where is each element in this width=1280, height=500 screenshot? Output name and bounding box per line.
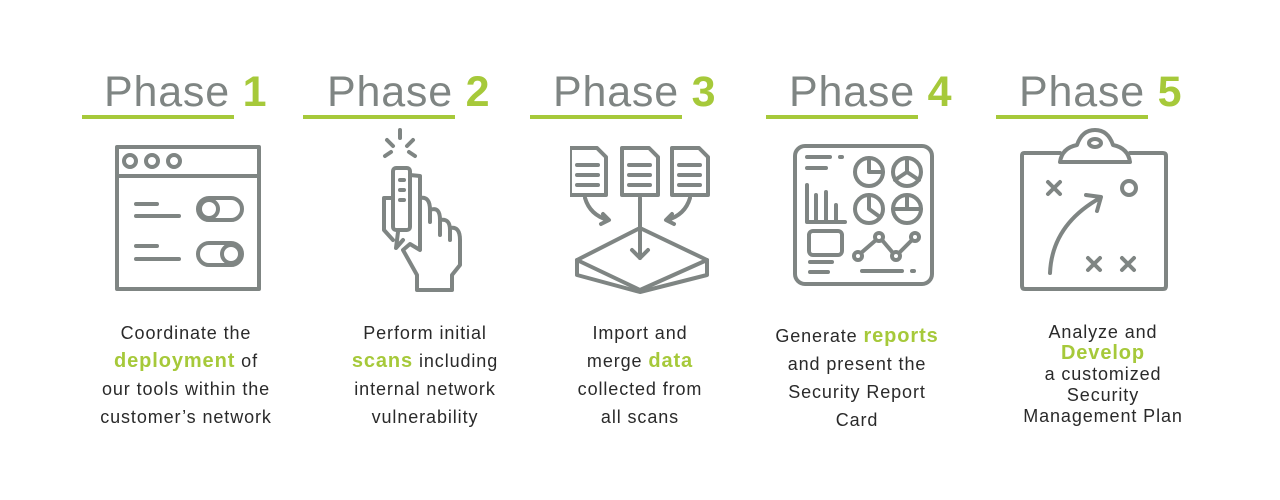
text phase 2: Perform initial xyxy=(363,323,487,343)
phase 5 heading: Phase 5 xyxy=(1019,68,1182,116)
text phase 2: vulnerability xyxy=(372,407,478,427)
text phase 1: Coordinate the xyxy=(121,323,251,343)
icon: browser with toggles xyxy=(115,145,261,291)
text phase 5: Management Plan xyxy=(1023,406,1183,426)
text phase 5: Security xyxy=(1067,385,1139,405)
text phase 4: Card xyxy=(836,410,878,430)
icon: hand with scanner xyxy=(382,128,462,292)
phase 4 heading: Phase 4 xyxy=(789,68,952,116)
text phase 2: internal network xyxy=(354,379,496,399)
text phase 5 xyxy=(1023,322,1183,426)
text phase 3: Import and xyxy=(592,323,688,343)
text phase 1 xyxy=(100,323,272,427)
text phase 4 xyxy=(775,325,939,430)
text phase 5: a customized xyxy=(1045,364,1161,384)
text phase 4: Security Report xyxy=(788,382,926,402)
icon: clipboard strategy xyxy=(1020,128,1168,291)
text phase 3: merge data xyxy=(587,350,693,372)
text phase 4: and present the xyxy=(788,354,926,374)
text phase 2: scans including xyxy=(352,350,498,372)
text phase 3: collected from xyxy=(578,379,702,399)
text phase 3 xyxy=(578,323,702,427)
phase 2 heading: Phase 2 xyxy=(327,68,490,116)
text phase 1: deployment of xyxy=(114,350,258,372)
text phase 5: Develop xyxy=(1061,342,1145,364)
text phase 4: Generate reports xyxy=(775,325,939,347)
phase 3 heading: Phase 3 xyxy=(553,68,716,116)
text phase 1: customer’s network xyxy=(100,407,272,427)
text phase 1: our tools within the xyxy=(102,379,270,399)
text phase 3: all scans xyxy=(601,407,679,427)
phase 1 heading: Phase 1 xyxy=(104,68,267,116)
icon: report dashboard xyxy=(793,144,934,286)
text phase 2 xyxy=(352,323,498,427)
icon: documents merge into box xyxy=(570,146,710,294)
text phase 5: Analyze and xyxy=(1048,322,1157,342)
